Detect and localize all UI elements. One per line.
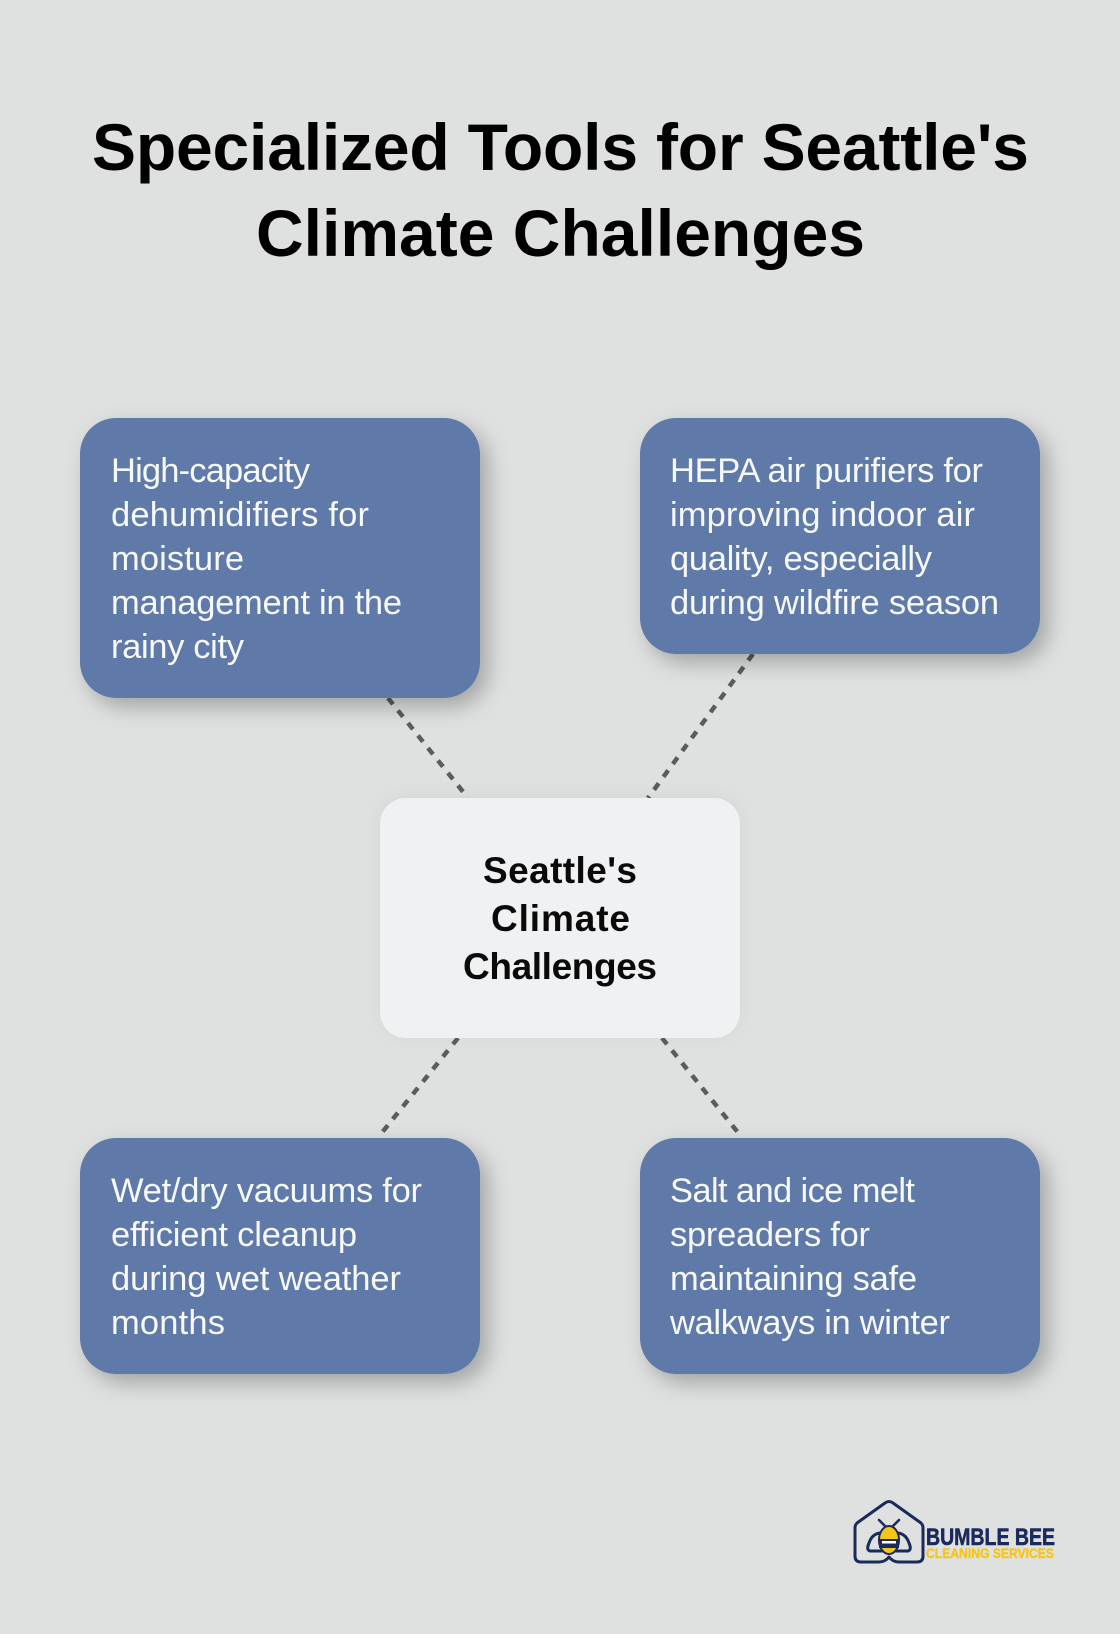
logo wordmark [926,1524,1055,1561]
logo wordmark: CLEANING SERVICES [926,1545,1054,1561]
title: Specialized Tools for Seattle's [92,110,1029,184]
panel: air purifiers: HEPA air purifiers for [670,452,983,490]
panel: center [380,798,740,1038]
logo [855,1502,1055,1562]
panel: salt spreaders: spreaders for [670,1216,870,1254]
connector: bottom left [380,1038,458,1135]
panel: dehumidifiers [80,418,480,698]
panel: air purifiers [640,418,1040,654]
title: Climate Challenges [256,196,865,270]
panel: dehumidifiers: moisture [111,540,244,578]
panel: wet/dry vacuums [80,1138,480,1374]
panel: salt spreaders: walkways in winter [669,1304,950,1342]
connector: bottom right [662,1038,740,1135]
panel: salt spreaders: maintaining safe [670,1260,917,1298]
panel: air purifiers: during wildfire season [670,584,999,622]
panel: wet/dry vacuums: months [111,1304,225,1342]
connector: top left [388,698,468,798]
title [92,110,1029,270]
panel: center: Seattle's [483,850,637,891]
panel: wet/dry vacuums: Wet/dry vacuums for [111,1172,422,1210]
connector: top right [648,654,753,798]
panel: center: Climate [491,898,630,939]
panel: salt spreaders: Salt and ice melt [670,1172,915,1210]
panel: center: Challenges [463,946,657,987]
panel: dehumidifiers: rainy city [111,628,245,666]
icon: house with bee [855,1502,923,1562]
panel: salt spreaders [640,1138,1040,1374]
panel: dehumidifiers: High-capacity [111,452,311,490]
logo wordmark: BUMBLE BEE [926,1524,1055,1551]
panel: wet/dry vacuums: efficient cleanup [111,1216,357,1254]
panel: dehumidifiers: dehumidifiers for [111,496,369,534]
panel: air purifiers: improving indoor air [670,496,975,534]
panel: dehumidifiers: management in the [111,584,402,622]
panel: wet/dry vacuums: during wet weather [111,1260,401,1298]
panel: air purifiers: quality, especially [670,540,933,578]
